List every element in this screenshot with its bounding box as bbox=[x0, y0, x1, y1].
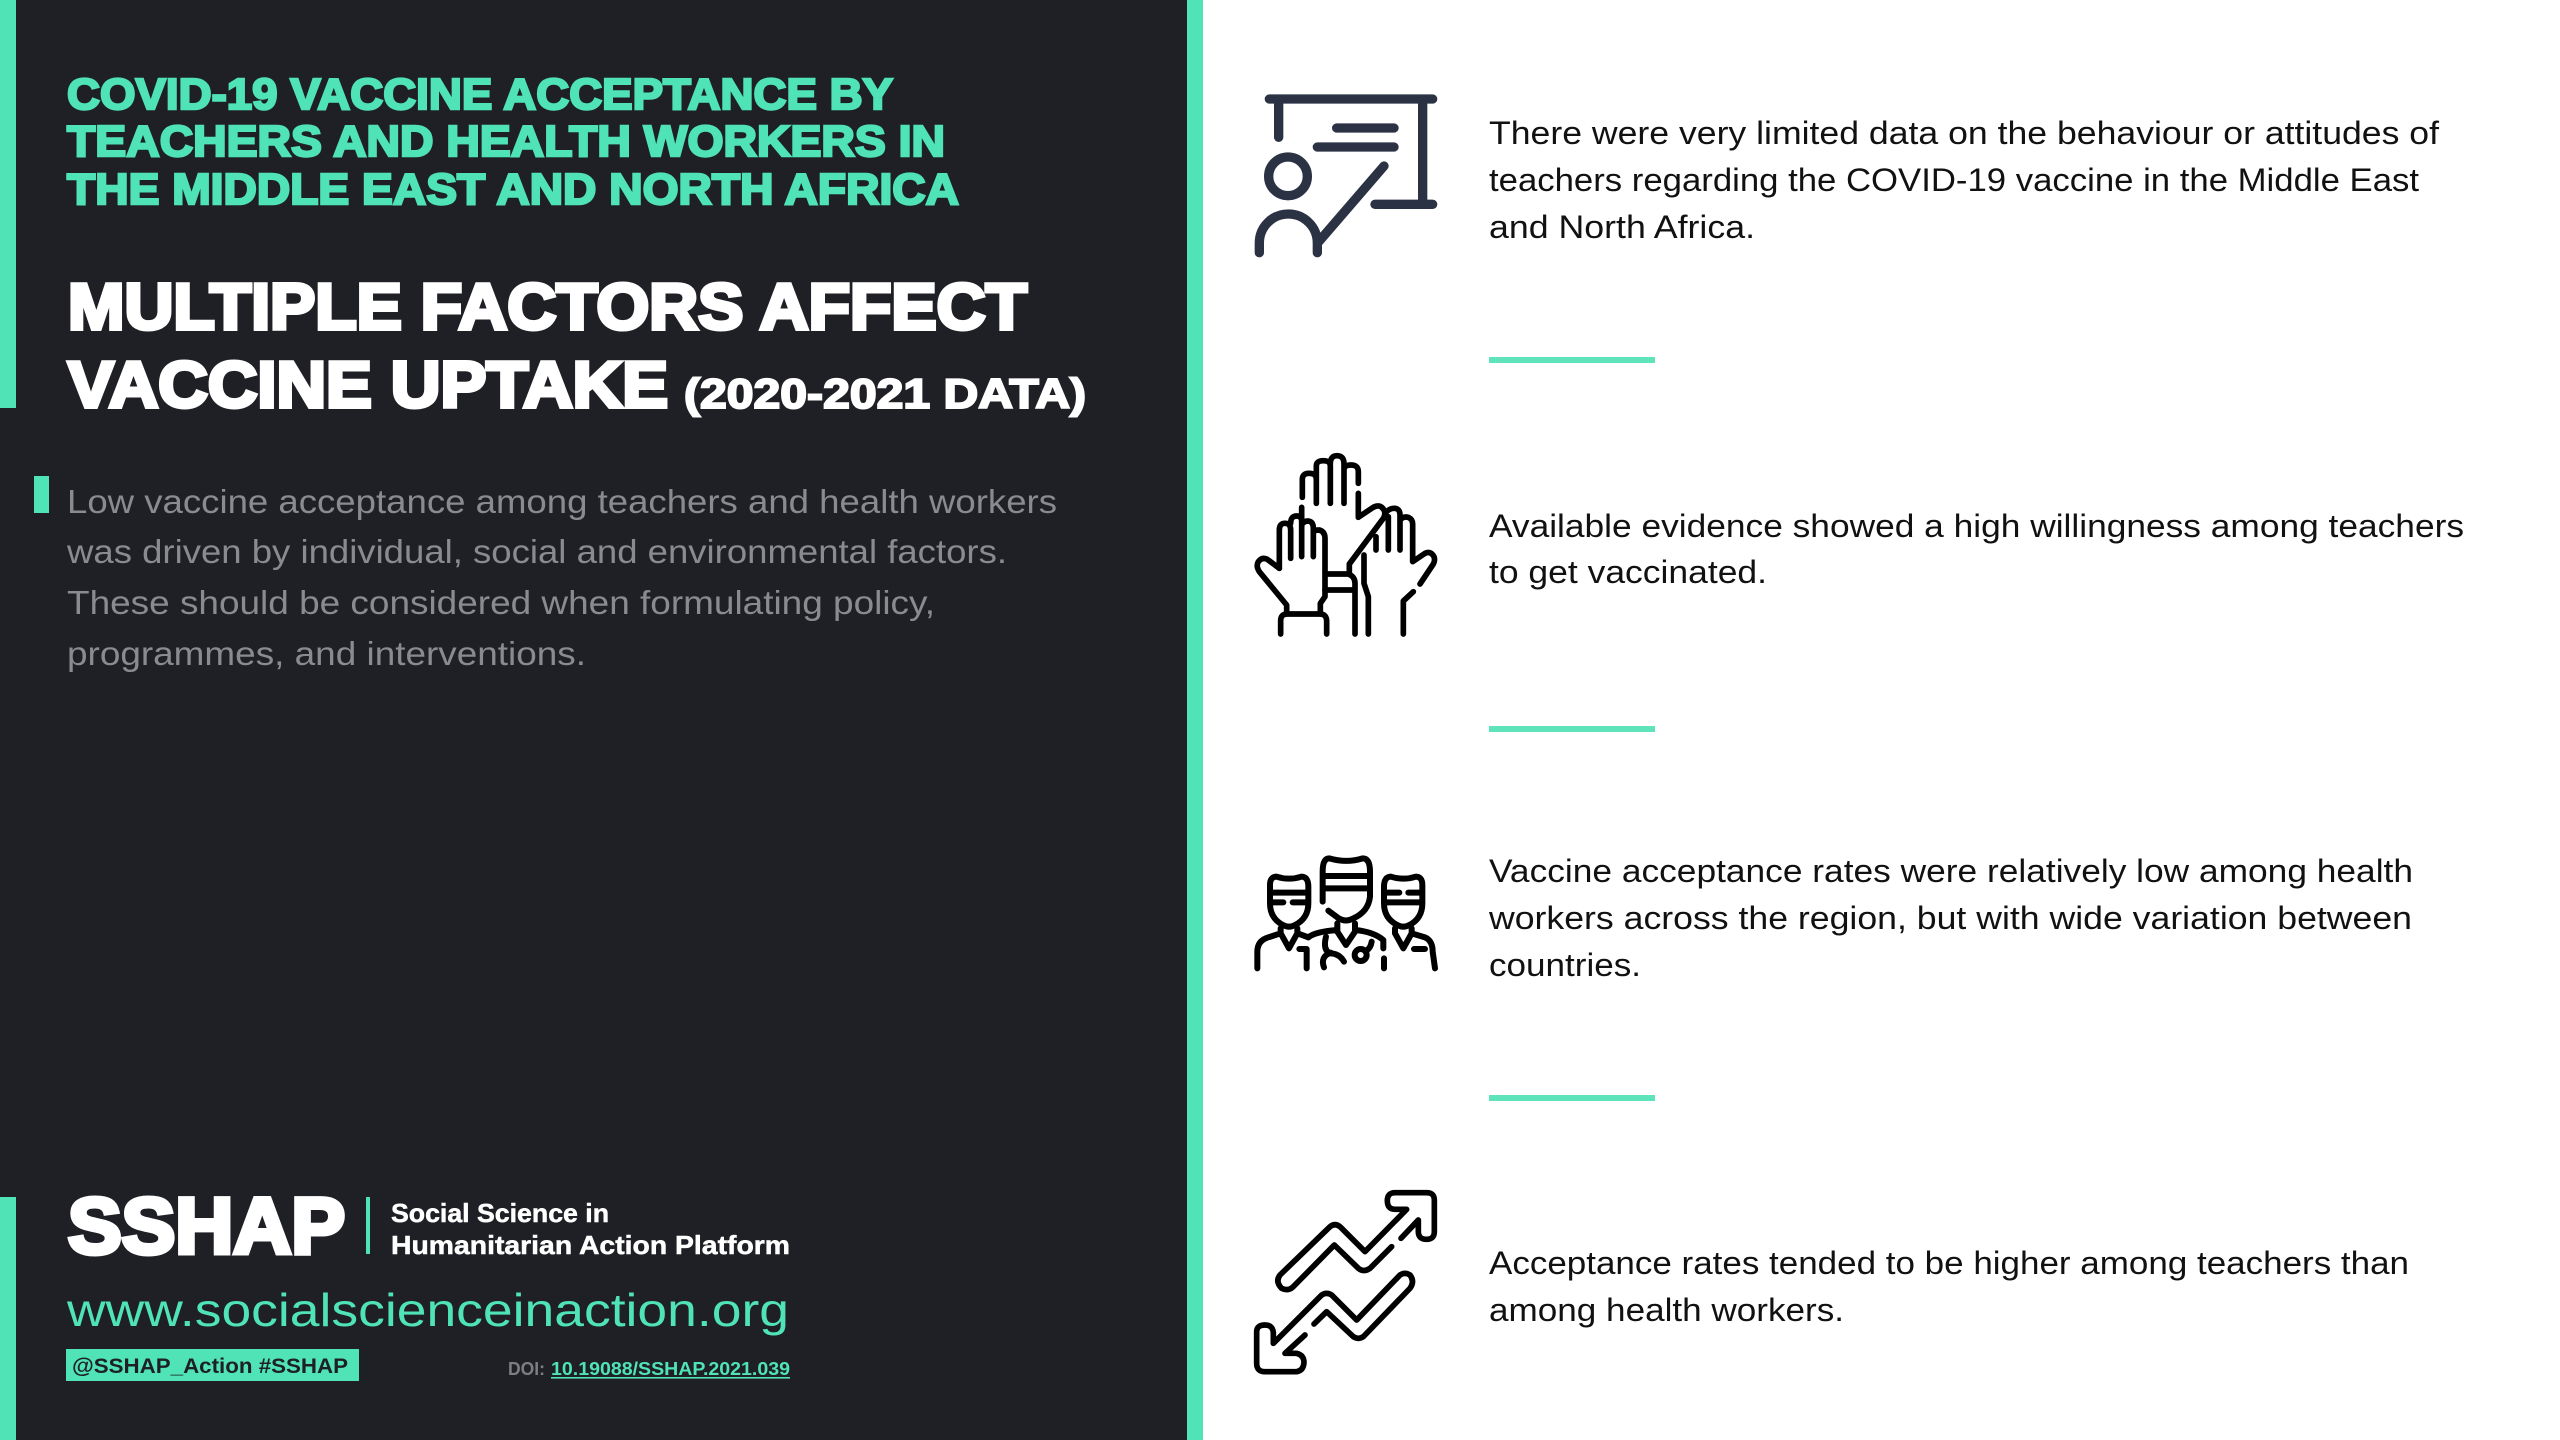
text: DOI reference: 10.19088/SSHAP.2021.039 bbox=[551, 1359, 790, 1379]
text block: summary paragraph bbox=[66, 483, 1057, 672]
title: multiple factors affect vaccine uptake: (2020-2021 DATA) bbox=[684, 370, 1086, 417]
icon: raised hands bbox=[1257, 456, 1435, 634]
text block: summary paragraph: programmes, and interventions. bbox=[67, 635, 586, 672]
text block: finding 1: and North Africa. bbox=[1489, 209, 1755, 245]
text block: finding 4 bbox=[1489, 1245, 2409, 1328]
label: social media handles: @SSHAP_Action #SSHAP bbox=[72, 1355, 348, 1378]
logo: SSHAP wordmark and platform name: Social Science in bbox=[391, 1198, 609, 1228]
text block: finding 2 bbox=[1489, 508, 2464, 590]
icon: paragraph accent marker bbox=[34, 476, 49, 513]
text block: finding 3: Vaccine acceptance rates were relatively low among health bbox=[1489, 853, 2413, 889]
icon: up and down trend arrows bbox=[1257, 1193, 1434, 1372]
text block: finding 3: workers across the region, but with wide variation between bbox=[1488, 900, 2412, 936]
text block: summary paragraph: Low vaccine acceptance among teachers and health workers bbox=[67, 483, 1057, 520]
label: social media handles bbox=[66, 1349, 359, 1381]
panel: left dark summary panel bbox=[0, 0, 1187, 1440]
text block: finding 2: to get vaccinated. bbox=[1489, 554, 1767, 590]
icon: three health workers bbox=[1257, 858, 1435, 968]
text block: finding 4: among health workers. bbox=[1489, 1292, 1844, 1328]
text block: finding 1: teachers regarding the COVID-19 vaccine in the Middle East bbox=[1489, 162, 2419, 198]
text block: finding 1 bbox=[1489, 115, 2439, 245]
logo: SSHAP wordmark and platform name: Humanitarian Action Platform bbox=[391, 1230, 790, 1260]
text block: finding 1: There were very limited data on the behaviour or attitudes of bbox=[1489, 115, 2439, 151]
panel: right findings list bbox=[1203, 0, 2560, 1440]
text: website url: www.socialscienceinaction.org bbox=[66, 1284, 789, 1336]
title: multiple factors affect vaccine uptake bbox=[68, 270, 1086, 421]
logo: SSHAP wordmark and platform name bbox=[68, 1181, 790, 1270]
text block: finding 4: Acceptance rates tended to be higher among teachers than bbox=[1489, 1245, 2409, 1281]
text block: summary paragraph: These should be considered when formulating policy, bbox=[67, 584, 935, 621]
text block: summary paragraph: was driven by individual, social and environmental factors. bbox=[66, 533, 1007, 570]
title: multiple factors affect vaccine uptake: MULTIPLE FACTORS AFFECT bbox=[68, 270, 1027, 343]
text block: finding 3 bbox=[1488, 853, 2413, 983]
title: multiple factors affect vaccine uptake: VACCINE UPTAKE bbox=[68, 348, 668, 421]
icon: teacher at presentation board bbox=[1259, 99, 1433, 253]
heading: study topic: COVID-19 VACCINE ACCEPTANCE BY bbox=[67, 71, 893, 119]
text block: finding 2: Available evidence showed a high willingness among teachers bbox=[1489, 508, 2464, 544]
panel: green vertical divider bbox=[1187, 0, 1203, 1440]
heading: study topic bbox=[67, 71, 959, 214]
logo: SSHAP wordmark and platform name: SSHAP bbox=[68, 1181, 345, 1270]
heading: study topic: THE MIDDLE EAST AND NORTH AFRICA bbox=[67, 166, 959, 214]
text block: finding 3: countries. bbox=[1489, 947, 1641, 983]
heading: study topic: TEACHERS AND HEALTH WORKERS IN bbox=[67, 118, 945, 166]
text: DOI reference: DOI: bbox=[508, 1359, 545, 1379]
